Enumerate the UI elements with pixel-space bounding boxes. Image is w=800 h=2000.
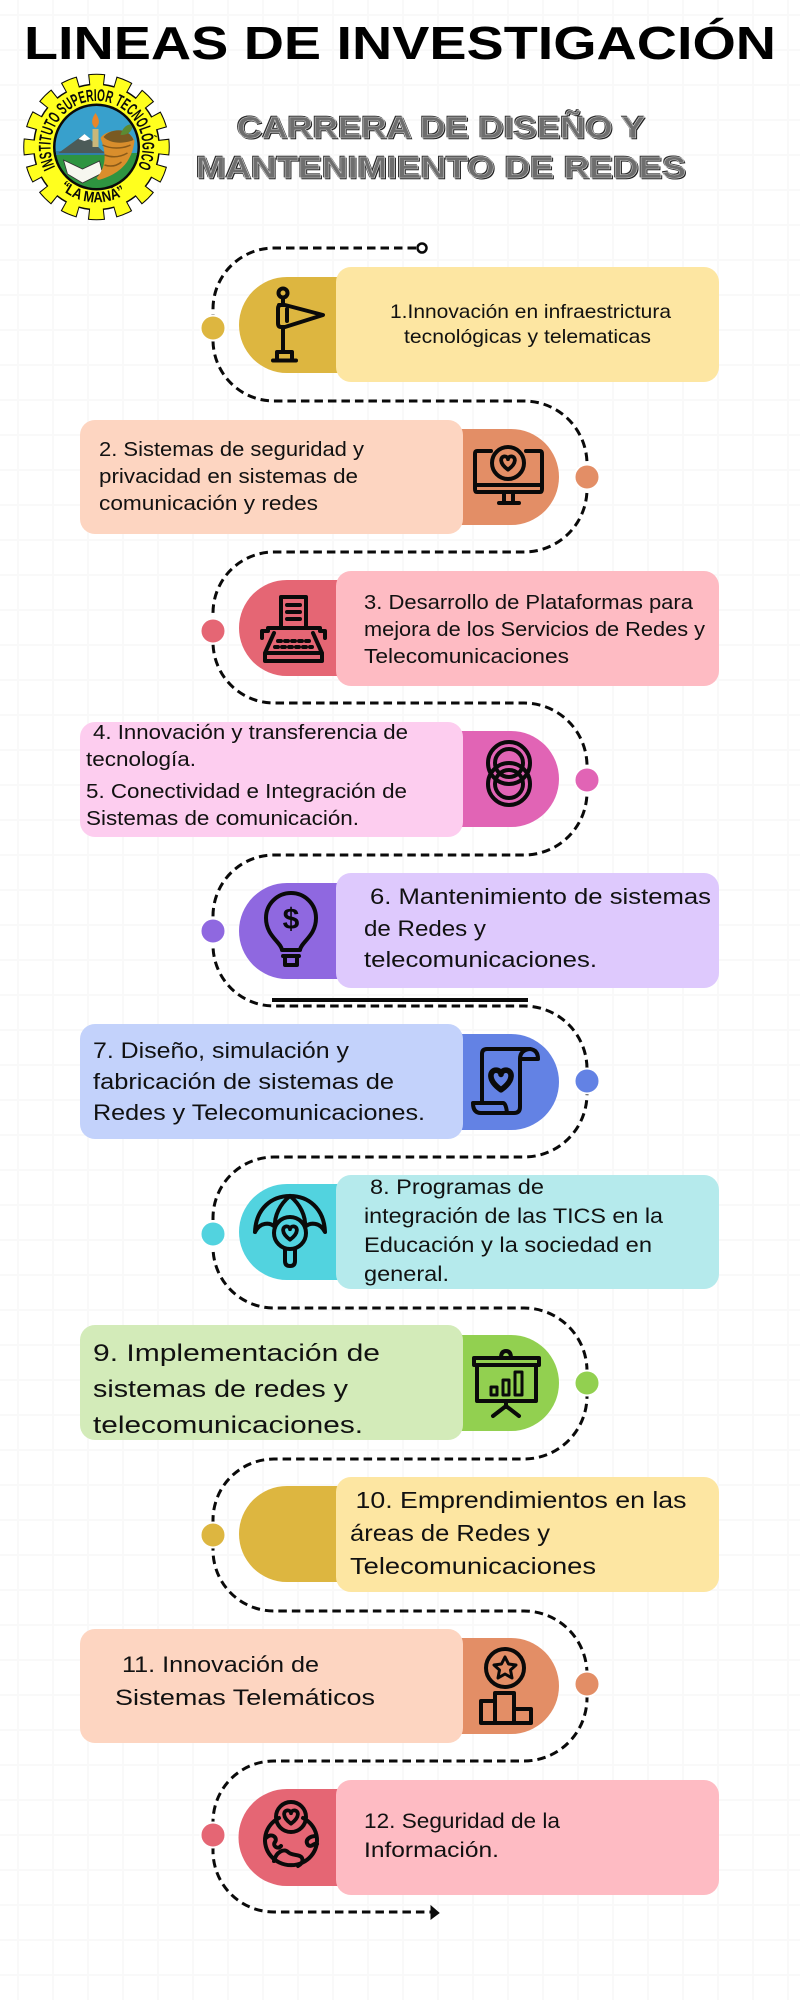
text	[93, 1340, 380, 1439]
card	[336, 1477, 719, 1592]
card	[80, 1629, 463, 1743]
pill	[239, 1486, 340, 1582]
text	[364, 1175, 663, 1286]
text: Educación y la sociedad en	[364, 1233, 652, 1257]
row 2	[80, 420, 600, 534]
logo text: institute name: INSTITUTO SUPERIOR TECNOLÓGICO	[38, 89, 157, 172]
text: mejora de los Servicios de Redes y	[364, 619, 705, 641]
pill	[460, 1335, 559, 1431]
subtitle: MANTENIMIENTO DE REDES	[196, 150, 686, 185]
text: Sistemas Telemáticos	[115, 1685, 375, 1710]
subtitle: CARRERA DE DISEÑO Y	[237, 110, 645, 145]
text: 7. Diseño, simulación y	[93, 1038, 350, 1063]
dot	[200, 918, 226, 944]
icon: scroll with heart	[473, 1049, 538, 1113]
text: 6. Mantenimiento de sistemas	[370, 884, 711, 909]
text: áreas de Redes y	[350, 1520, 551, 1546]
text: comunicación y redes	[99, 493, 318, 515]
row 6	[80, 1024, 600, 1139]
card	[80, 1325, 463, 1440]
row 5	[200, 873, 719, 988]
title: LINEAS DE INVESTIGACIÓN	[24, 17, 776, 69]
text: 10. Emprendimientos en las	[356, 1487, 686, 1513]
text: 3. Desarrollo de Plataformas para	[364, 592, 694, 614]
card	[80, 1024, 463, 1139]
text	[350, 1487, 686, 1579]
text: sistemas de redes y	[93, 1376, 349, 1403]
text: Sistemas de comunicación.	[86, 808, 359, 830]
card	[80, 722, 463, 837]
dot	[574, 1068, 600, 1094]
text	[364, 884, 711, 972]
text: 2. Sistemas de seguridad y	[99, 439, 364, 461]
text	[115, 1652, 375, 1710]
dot	[200, 1222, 226, 1246]
timeline end arrow	[431, 1906, 439, 1919]
text: Telecomunicaciones	[364, 646, 569, 668]
card	[336, 1780, 719, 1895]
text: privacidad en sistemas de	[99, 466, 358, 488]
icon: umbrella with heart	[255, 1196, 325, 1266]
card	[336, 873, 719, 988]
icon: flag	[273, 288, 323, 360]
text: 11. Innovación de	[122, 1652, 319, 1677]
icon: linked rings	[488, 742, 530, 805]
card	[336, 267, 719, 382]
pill	[238, 1789, 340, 1886]
text	[86, 722, 408, 830]
logo: Instituto Superior Tecnológico La Maná	[23, 74, 170, 220]
dashed timeline path	[213, 248, 587, 1912]
row 4	[80, 722, 600, 837]
dot	[574, 1370, 600, 1396]
text: general.	[364, 1262, 449, 1286]
text: 5. Conectividad e Integración de	[86, 781, 407, 803]
pill	[460, 1034, 559, 1130]
pill	[239, 277, 340, 373]
icon: typewriter	[262, 597, 325, 661]
pill	[460, 429, 559, 525]
pill	[239, 580, 340, 676]
text	[93, 1038, 425, 1125]
icon: light bulb with dollar: $	[283, 903, 300, 936]
icon: monitor with heart	[475, 447, 542, 503]
pill	[460, 1638, 559, 1734]
logo text: location: “LA MANÁ”	[64, 181, 122, 202]
text: telecomunicaciones.	[364, 947, 597, 972]
text: telecomunicaciones.	[93, 1412, 363, 1439]
dot	[200, 316, 226, 340]
dot	[574, 1672, 600, 1696]
text: 1.Innovación en infraestrictura	[390, 301, 671, 323]
dot	[200, 1822, 226, 1848]
row 1	[200, 267, 719, 382]
pill	[239, 1184, 340, 1280]
text	[364, 592, 705, 668]
text: 4. Innovación y transferencia de	[93, 722, 408, 744]
row 11	[200, 1780, 719, 1895]
pill	[239, 883, 340, 979]
text: de Redes y	[364, 916, 486, 941]
timeline start marker	[418, 244, 426, 252]
text: 12. Seguridad de la	[364, 1809, 560, 1833]
dot	[574, 768, 600, 792]
icon: star medal and podium	[481, 1649, 531, 1723]
text	[364, 1809, 560, 1862]
icon: globe with heart pin	[265, 1802, 317, 1866]
card	[336, 571, 719, 686]
text	[99, 439, 364, 515]
icon: light bulb with dollar	[266, 893, 316, 965]
text: Información.	[364, 1838, 499, 1862]
dot	[200, 1522, 226, 1548]
dot	[200, 618, 226, 644]
card	[80, 420, 463, 534]
pill	[460, 731, 559, 827]
card	[336, 1175, 719, 1289]
row 7	[200, 1175, 719, 1289]
subtitle	[196, 110, 686, 185]
text: fabricación de sistemas de	[93, 1069, 394, 1094]
text: 9. Implementación de	[93, 1340, 380, 1367]
row 10	[80, 1629, 600, 1743]
black divider bar	[272, 998, 528, 1002]
text: tecnología.	[86, 749, 196, 771]
text: Redes y Telecomunicaciones.	[93, 1100, 425, 1125]
icon: presentation board	[474, 1351, 539, 1416]
text: tecnológicas y telematicas	[404, 326, 651, 348]
text: Telecomunicaciones	[350, 1553, 596, 1579]
dot	[574, 464, 600, 490]
text: 8. Programas de	[370, 1175, 544, 1199]
row 3	[200, 571, 719, 686]
row 9	[200, 1477, 719, 1592]
text: integración de las TICS en la	[364, 1204, 663, 1228]
row 8	[80, 1325, 600, 1440]
text	[390, 301, 671, 348]
